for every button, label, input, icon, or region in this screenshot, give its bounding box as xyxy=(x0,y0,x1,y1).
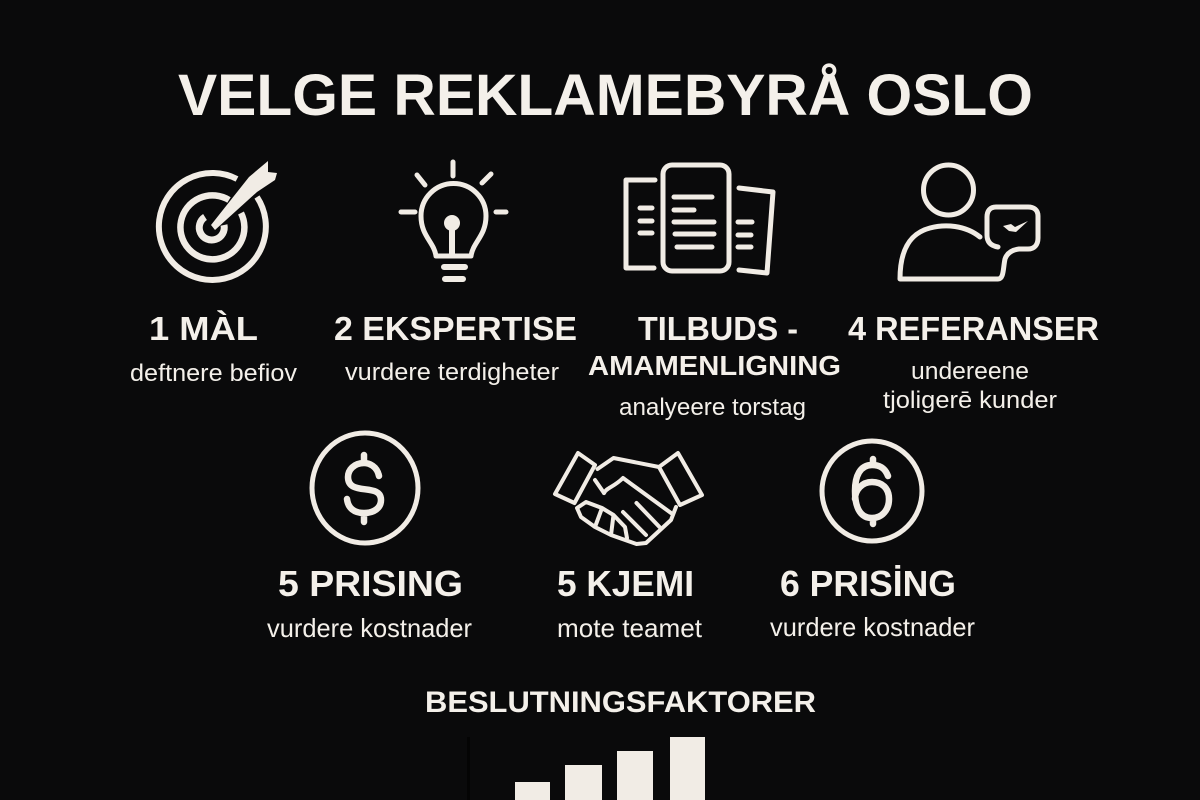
icon: handshake xyxy=(555,453,702,544)
heading: 1 MÀL xyxy=(149,310,258,347)
heading: 2 EKSPERTISE xyxy=(334,310,577,347)
item 4: referanser xyxy=(848,165,1099,414)
description: vurdere terdigheter xyxy=(345,359,559,386)
description: vurdere kostnader xyxy=(267,613,472,643)
heading: TILBUDS - xyxy=(638,310,798,347)
icon: light bulb xyxy=(401,162,506,279)
icon: dollar coin xyxy=(312,433,418,543)
icon: person with speech bubble xyxy=(900,165,1038,279)
item 2: ekspertise xyxy=(334,162,577,386)
item 1: mål xyxy=(130,161,297,387)
item 3: tilbudssammenligning: AMAMENLIGNING xyxy=(588,350,841,381)
description: vurdere kostnader xyxy=(770,612,975,642)
item 4: referanser: tjoligerē kunder xyxy=(883,387,1057,414)
icon: documents xyxy=(626,165,773,273)
section heading: BESLUTNINGSFAKTORER xyxy=(425,686,816,719)
description: deftnere befiov xyxy=(130,360,297,387)
heading: 6 PRISİNG xyxy=(780,563,956,604)
icon: target with arrow xyxy=(159,161,277,280)
bar chart xyxy=(467,737,705,800)
heading: 5 KJEMI xyxy=(557,563,694,604)
item 3: tilbudssammenligning xyxy=(588,165,841,421)
item 7: prising xyxy=(770,441,975,642)
heading: 4 REFERANSER xyxy=(848,310,1099,347)
item 6: kjemi xyxy=(555,453,703,643)
icon: coin with six xyxy=(822,441,922,541)
heading: 5 PRISING xyxy=(278,563,463,604)
description: analyeere torstag xyxy=(619,394,806,421)
item 5: prising xyxy=(267,433,472,643)
title: VELGE REKLAMEBYRÅ OSLO xyxy=(178,63,1033,128)
description: undereene xyxy=(911,358,1029,385)
description: mote teamet xyxy=(557,613,703,643)
